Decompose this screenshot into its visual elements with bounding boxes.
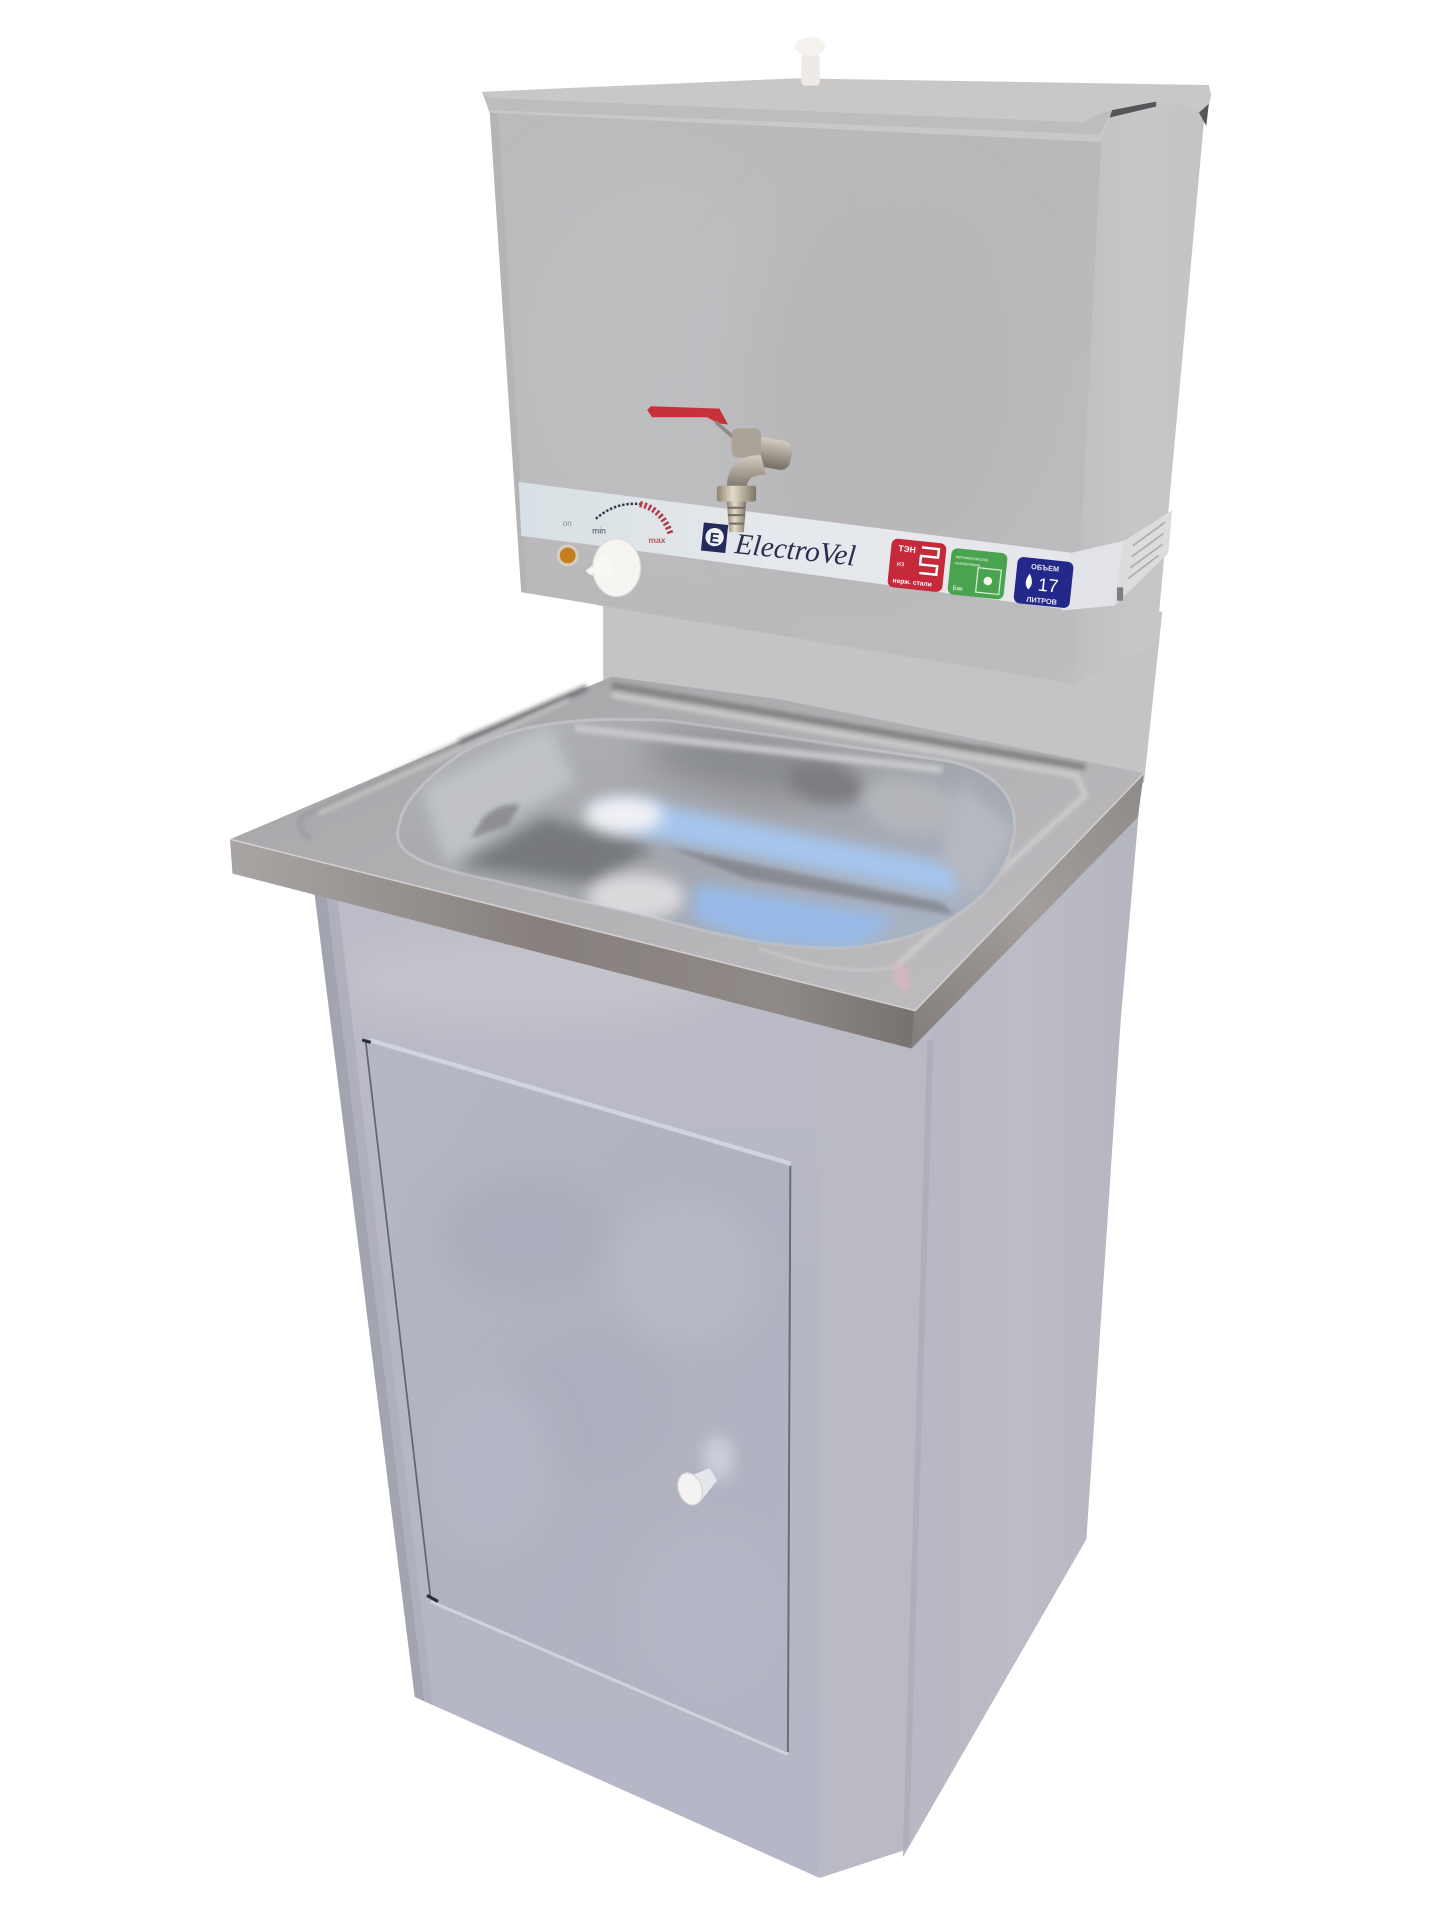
sink rim groove: [612, 685, 1085, 767]
side sticker: [1115, 510, 1172, 606]
cabinet: [313, 795, 1140, 1878]
water tank: [482, 37, 1211, 684]
badge: auto shut-off: [947, 548, 1008, 600]
dial scale: [592, 504, 670, 545]
brand name: ElectroVel: [732, 528, 857, 573]
product photo: washbasin with water heater on cabinet: [230, 38, 1212, 1878]
faucet body: [742, 434, 794, 471]
badge: heating element: из: [896, 559, 905, 568]
cabinet chamfer corner: [814, 1003, 931, 1878]
badge: heating element: нерж. стали: [892, 577, 932, 589]
badge: 17 litre volume: ОБЪЕМ: [1031, 562, 1060, 574]
icon: lid knob: [795, 37, 825, 86]
control strip: [519, 482, 1172, 611]
faucet: [647, 406, 794, 532]
sink right edge: [911, 773, 1144, 1049]
badge: 17 litre volume: 17: [1037, 574, 1059, 597]
tank front face: [489, 106, 1102, 684]
indicator lamp: [557, 544, 579, 566]
sink bowl: [398, 719, 1015, 948]
sink top plate: [230, 677, 1144, 1011]
cabinet front face: [313, 883, 820, 1878]
back panel: [603, 587, 1162, 783]
logo: [701, 522, 728, 553]
badge: 17 litre volume: [1013, 556, 1074, 609]
badge: auto shut-off: выключение: [955, 560, 981, 568]
tank lid: [482, 78, 1211, 142]
icon: door knob: [673, 1468, 717, 1508]
badge: auto shut-off: Бак: [952, 585, 963, 593]
cabinet door: [362, 1040, 790, 1754]
badge: 17 litre volume: ЛИТРОВ: [1026, 595, 1057, 607]
tank lower band: [521, 514, 1077, 684]
hose nipple: [717, 486, 756, 502]
logo: Е: [709, 531, 720, 548]
badge: heating element: ТЭН: [898, 543, 916, 555]
dial scale: min: [592, 525, 606, 535]
cabinet right side face: [903, 795, 1140, 1857]
indicator label: on: on: [563, 519, 572, 528]
dial scale: max: [648, 535, 666, 545]
sink front edge: [230, 839, 915, 1049]
tank right side: [1073, 95, 1206, 684]
icon: thermostat knob: [586, 539, 640, 596]
badge: auto shut-off: автоматическое: [956, 554, 989, 562]
badge: heating element: [887, 538, 947, 593]
sink: [230, 677, 1144, 1049]
faucet red lever: [647, 406, 728, 425]
